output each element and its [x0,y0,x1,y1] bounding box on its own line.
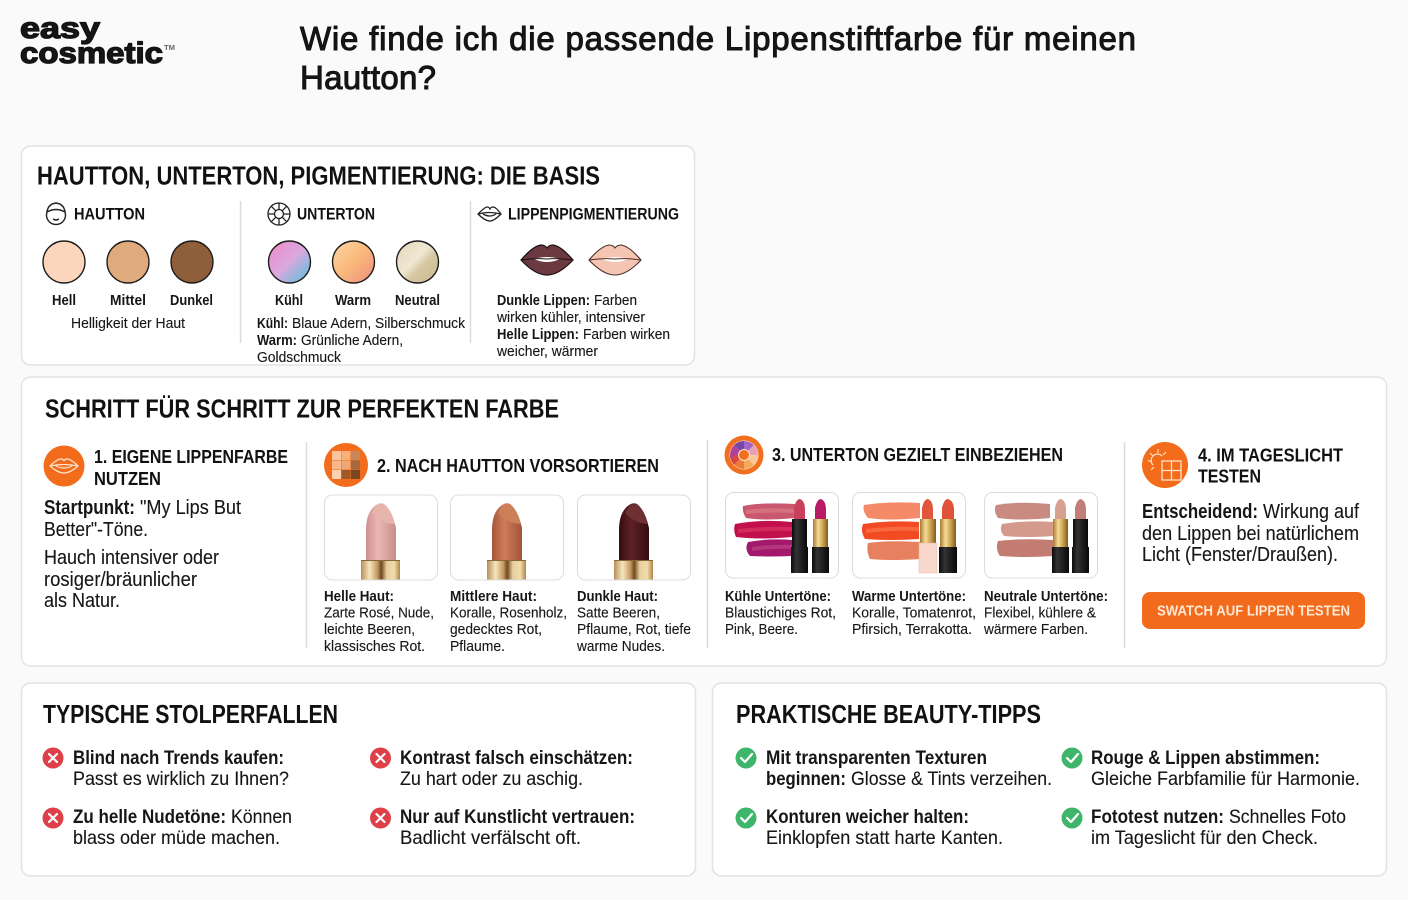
item: Rouge und Lippen: Rouge & Lippen abstimmen: [1091,747,1320,769]
item: Fototest [1062,806,1346,849]
logo: easy cosmetic: cosmetic [20,37,163,70]
step 2 title: 2. NACH HAUTTON VORSORTIEREN [377,455,659,476]
step 3 title: 3. UNTERTON GEZIELT EINBEZIEHEN [772,444,1063,465]
item: transparente Texturen: Glosse & Tints verzeihen. [851,768,1052,790]
text: Dunkle Haut: Dunkle Haut: [577,588,658,605]
labels: Hautton: Hell [52,292,76,309]
text: Warme Untertöne: Pfirsich, Terrakotta. [852,621,972,638]
heading: Schritt für Schritt: SCHRITT FÜR SCHRITT ZUR PERFEKTEN FARBE [45,394,559,424]
text: Neutrale Untertöne: Flexibel, kühlere & [984,604,1096,622]
swatches: Hautton [43,241,213,283]
illustration: light lips [589,245,641,275]
labels: Unterton: Warm [335,292,371,309]
step 1 text: Better"-Töne. [44,519,148,541]
item: Fototest: Schnelles Foto [1229,806,1346,828]
title [300,20,1136,96]
text: Mittlere Haut [450,588,567,655]
icon: sun and window on orange [1142,442,1188,488]
item: Zu helle Nudetöne: blass oder müde machen. [73,827,280,849]
text: Mittlere Haut: Koralle, Rosenholz, [450,604,567,622]
labels: Hautton: Mittel [110,292,146,309]
text: Mittlere Haut: Mittlere Haut: [450,588,537,605]
text: Lippenpigmentierung explanation: weicher, wärmer [496,343,598,360]
card: warm swatches [852,492,966,578]
step 4 text: Wirkung auf [1263,501,1359,523]
text: Warme Untertöne: Warme Untertöne: [852,588,966,605]
panel: Praktische Beauty-Tipps [712,683,1386,876]
step 3 [724,436,1108,638]
step 4 title: TESTEN [1198,466,1261,486]
text: Lippenpigmentierung explanation: Farben wirken [583,326,670,343]
text: Kühle Untertöne: Blaustichiges Rot, [725,604,836,622]
labels: Hautton [52,292,213,309]
item: Konturen: Konturen weicher halten: [766,806,969,828]
text: Helle Haut [324,588,434,655]
item: Kunstlicht: Badlicht verfälscht oft. [400,827,581,849]
text: Helle Haut: Helle Haut: [324,588,394,605]
item: Kontrast falsch [370,747,633,790]
text: Kühle Untertöne [725,588,836,638]
card: medium lipstick [450,495,564,580]
item: Kontrast falsch: Kontrast falsch einschätzen: [400,747,633,769]
step 1 text: rosiger/bräunlicher [44,569,197,591]
step 1 title: 1. EIGENE LIPPENFARBE [94,446,288,467]
text: Dunkle Haut: Pflaume, Rot, tiefe [577,621,691,638]
item: Fototest: Fototest nutzen: [1091,806,1224,828]
step 1 text [44,497,241,612]
step 1 title: NUTZEN [94,468,161,489]
illustration: dark lips [521,245,573,275]
text: Unterton explanation: Goldschmuck [257,349,341,366]
step 1 [44,446,288,612]
text: Warme Untertöne [852,588,976,638]
item: Blind nach Trends [42,747,289,790]
item: transparente Texturen: beginnen: [766,768,846,790]
text: Helligkeit: Helligkeit der Haut [71,315,186,332]
text: Mittlere Haut: Pflaume. [450,638,505,655]
logo: easy cosmetic: easy [20,12,100,45]
subheading: Lippenpigmentierung: LIPPENPIGMENTIERUNG [508,204,679,224]
text: Kühle Untertöne: Kühle Untertöne: [725,588,831,605]
heading: Basis: HAUTTON, UNTERTON, PIGMENTIERUNG: DIE BASIS [37,160,600,190]
text: Kühle Untertöne: Pink, Beere. [725,621,798,638]
card: dark lipstick [578,495,690,580]
item: Fototest: im Tageslicht für den Check. [1091,827,1318,849]
icon: face [46,203,66,224]
text: Helle Haut: Zarte Rosé, Nude, [324,604,434,622]
item: Kontrast falsch: Zu hart oder zu aschig. [400,768,583,790]
text: Unterton explanation [257,315,465,366]
button: Swatch testen [1142,592,1365,629]
step 4 [1142,442,1365,629]
title: Wie finde ich die passende Lippenstiftfarbe für meinen [300,20,1136,57]
logo: easy cosmetic: TM [164,45,175,52]
text: Warme Untertöne: Koralle, Tomatenrot, [852,604,976,622]
text: Lippenpigmentierung explanation: Helle Lippen: [497,326,579,343]
card: cool swatches [726,492,838,578]
heading: Stolperfallen: TYPISCHE STOLPERFALLEN [43,699,338,729]
step 1 title [94,446,288,489]
subheading: Unterton: UNTERTON [297,204,375,224]
text: Helle Haut: klassisches Rot. [324,638,425,655]
step 4 text: den Lippen bei natürlichem [1142,523,1359,545]
text: Unterton explanation: Kühl: [257,315,288,332]
text: Dunkle Haut: Satte Beeren, [577,604,660,622]
item: Blind nach Trends: Passt es wirklich zu Ihnen? [73,768,289,790]
labels: Hautton: Dunkel [170,292,213,309]
item: Konturen [736,806,1003,849]
card: light lipstick [324,495,438,580]
item: Rouge und Lippen: Gleiche Farbfamilie für Harmonie. [1091,768,1360,790]
step 1 text: "My Lips But [140,497,241,519]
swatches: Unterton [268,241,438,283]
button: Swatch testen: SWATCH AUF LIPPEN TESTEN [1157,602,1350,620]
text: Helle Haut: leichte Beeren, [324,621,415,638]
icon: lips on orange [44,446,84,486]
text: Neutrale Untertöne: Neutrale Untertöne: [984,588,1108,605]
logo: easy cosmetic [20,12,175,70]
step 4 text: Licht (Fenster/Draußen). [1142,544,1338,566]
text: Dunkle Haut: warme Nudes. [576,638,665,655]
panel: Die Basis [22,146,694,366]
text: Lippenpigmentierung explanation: Farben [594,292,637,309]
icon: palette on orange [324,443,368,487]
step 4 title [1198,444,1344,486]
item: Blind nach Trends: Blind nach Trends kaufen: [73,747,284,769]
heading: Beauty-Tipps: PRAKTISCHE BEAUTY-TIPPS [736,699,1041,729]
step 4 text: Entscheidend: [1142,501,1258,523]
labels: Unterton [275,292,440,309]
item: transparente Texturen: Mit transparenten Texturen [766,747,987,769]
item: Rouge und Lippen [1062,747,1360,790]
item: Zu helle Nudetöne [42,806,292,849]
step 1 text: als Natur. [44,590,120,612]
text: Neutrale Untertöne [983,588,1108,638]
text: Mittlere Haut: gedecktes Rot, [450,621,542,638]
labels: Unterton: Kühl [275,292,303,309]
icon: lips outline [478,207,501,221]
text: Unterton explanation: Warm: [257,332,297,349]
item: Konturen: Einklopfen statt harte Kanten. [766,827,1003,849]
text: Lippenpigmentierung explanation: wirken kühler, intensiver [496,309,645,326]
step 2 [324,443,691,655]
item: Kunstlicht: Nur auf Kunstlicht vertrauen: [400,806,635,828]
card: neutral swatches [984,492,1098,578]
text: Lippenpigmentierung explanation: Dunkle Lippen: [497,292,590,309]
text: Unterton explanation: Grünliche Adern, [301,332,403,349]
item: Kunstlicht [370,806,635,849]
item: transparente Texturen [736,747,1052,790]
title: Hautton? [300,59,436,96]
panel: Typische Stolperfallen [22,683,696,876]
step 1 text: Startpunkt: [44,497,135,519]
text: Dunkle Haut [576,588,691,655]
text: Neutrale Untertöne: wärmere Farben. [983,621,1088,638]
item: Zu helle Nudetöne: Zu helle Nudetöne: [73,806,226,828]
step 4 text [1142,501,1359,566]
panel: Schritt für Schritt [22,377,1386,666]
icon: colour wheel on orange [724,436,764,474]
step 4 title: 4. IM TAGESLICHT [1198,444,1344,466]
labels: Unterton: Neutral [395,292,440,309]
icon: colour wheel outline [268,203,290,225]
item: Zu helle Nudetöne: Können [231,806,292,828]
step 1 text: Hauch intensiver oder [44,547,219,569]
text: Lippenpigmentierung explanation [496,292,670,360]
text: Unterton explanation: Blaue Adern, Silberschmuck [292,315,465,332]
subheading: Hautton: HAUTTON [74,204,145,224]
